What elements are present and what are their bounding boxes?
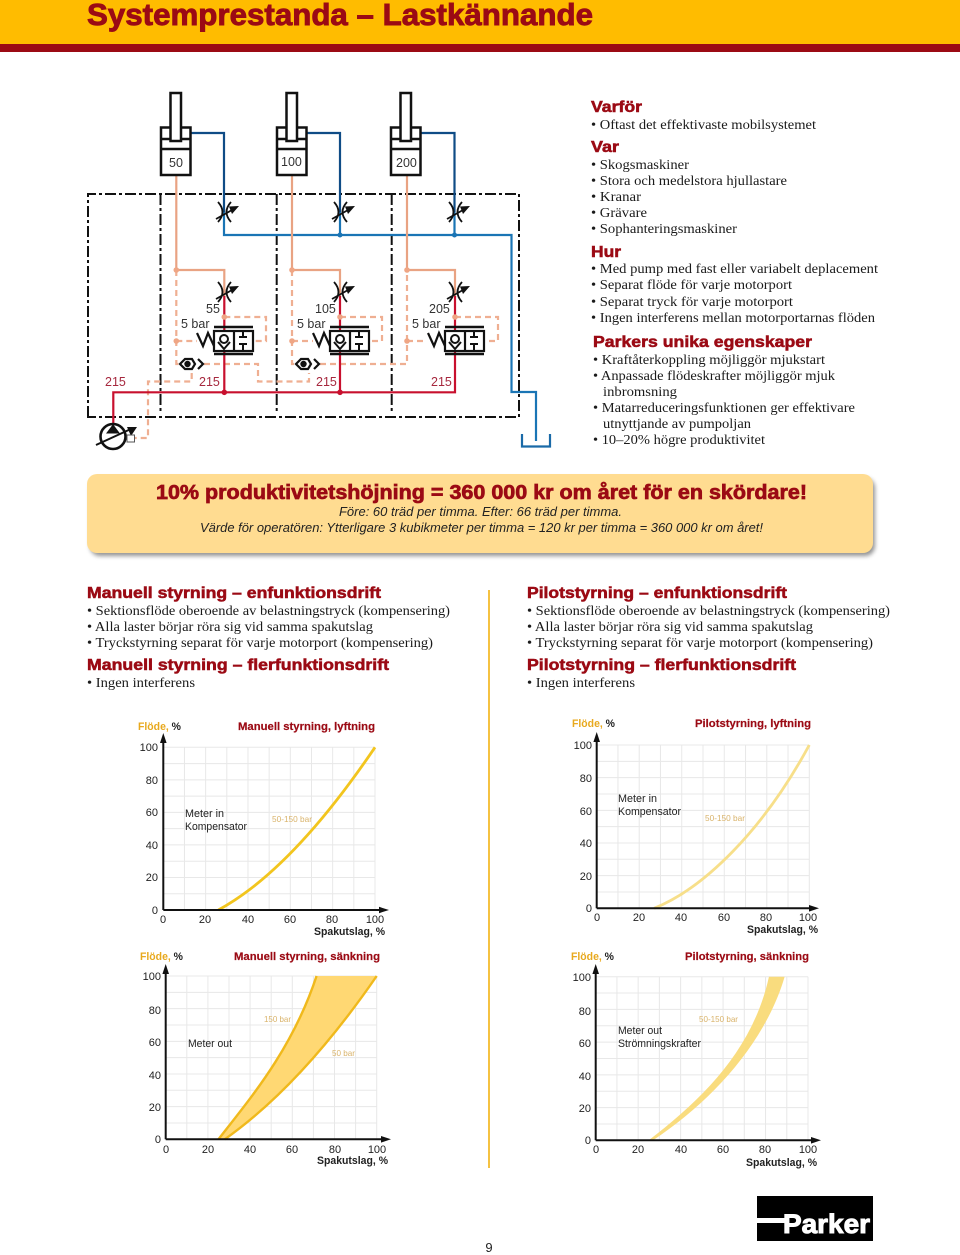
diagram pressure labels: 5 bar [412,317,440,331]
text block: Varför / Var / Hur / Parkers: • Stora och medelstora hjullastare [591,174,787,189]
chart: Manuell styrning, sänkning: 40 [149,1070,161,1082]
diagram pressure labels: 5 bar [297,317,326,331]
callout: productivity: 10% produktivitetshöjning = 360 000 kr om året för en skördare! [156,481,807,504]
chart: Pilotstyrning, sänkning: 0 [585,1135,591,1147]
text block: Varför / Var / Hur / Parkers: • Kranar [591,190,641,205]
text block: Varför / Var / Hur / Parkers: • Anpassade flödeskrafter möjliggör mjuk [593,369,835,384]
diagram pressure labels: 215 [316,375,337,389]
chart: Manuell styrning, lyftning: 20 [146,872,158,884]
chart: Manuell styrning, lyftning: Meter in [185,808,224,820]
header band [0,0,960,52]
diagram pressure labels: 105 [315,302,336,316]
chart: Pilotstyrning, sänkning: 40 [579,1071,591,1083]
diagram pressure labels: 55 [206,302,220,316]
cylinder 1 [161,93,190,175]
diagram pressure labels: 100 [281,155,302,169]
diagram pressure labels [105,155,452,389]
chart: Pilotstyrning, sänkning: 20 [632,1144,644,1156]
chart: Manuell styrning, lyftning: 80 [326,914,338,926]
callout: productivity [87,474,875,556]
text block: Manuell styrning: Manuell styrning – flerfunktionsdrift [87,657,390,674]
chart: Pilotstyrning, sänkning: Pilotstyrning, sänkning [685,951,809,963]
diagram pressure labels: 215 [431,375,452,389]
chart: Pilotstyrning, sänkning: 60 [717,1144,729,1156]
chart: Pilotstyrning, lyftning: 40 [580,838,592,850]
pump [96,424,137,449]
chart: Manuell styrning, lyftning: 20 [199,914,211,926]
callout: productivity: Värde för operatören: Ytterligare 3 kubikmeter per timma = 120 kr per timma = 360 000 kr om året! [200,520,763,535]
diagram pressure labels: 200 [396,156,417,170]
text block: Manuell styrning: Manuell styrning – enfunktionsdrift [87,585,382,602]
chart: Pilotstyrning, sänkning: Spakutslag, % [746,1157,817,1169]
diagram pressure labels: 215 [199,375,220,389]
chart: Manuell styrning, lyftning: Kompensator [185,821,247,833]
chart: Manuell styrning, lyftning: 50-150 bar [272,814,312,824]
callout: productivity: Före: 60 träd per timma. Efter: 66 träd per timma. [339,504,622,519]
blue return lines [190,133,550,446]
chart: Manuell styrning, sänkning: 20 [149,1102,161,1114]
diagram pressure labels: 205 [429,302,450,316]
chart: Manuell styrning, sänkning: 80 [329,1144,341,1156]
compensator valves [197,327,484,354]
chart: Manuell styrning, sänkning: Flöde, % [140,951,183,963]
chart: Pilotstyrning, lyftning: 100 [574,740,592,752]
chart: Manuell styrning, sänkning: 100 [368,1144,386,1156]
chart: Manuell styrning, sänkning: 40 [244,1144,256,1156]
text block: Manuell styrning: • Ingen interferens [87,676,195,691]
chart: Pilotstyrning, lyftning: Meter in [618,793,657,805]
chart: Pilotstyrning, lyftning: Spakutslag, % [747,924,818,936]
text block: Manuell styrning: • Tryckstyrning separat för varje motorport (kompensering) [87,636,433,651]
text block: Varför / Var / Hur / Parkers: Hur [591,244,621,261]
text block: Pilotstyrning: • Sektionsflöde oberoende av belastningstryck (kompensering) [527,604,890,619]
upper restrictors [216,202,470,222]
diagram pressure labels: 5 bar [181,317,210,331]
center divider [488,590,490,1168]
chart: Manuell styrning, lyftning: 0 [160,914,166,926]
chart: Manuell styrning, sänkning: Spakutslag, % [317,1155,388,1167]
text block: Varför / Var / Hur / Parkers: • Separat tryck för varje motorport [591,295,793,310]
chart: Pilotstyrning, sänkning: 40 [675,1144,687,1156]
text block: Varför / Var / Hur / Parkers: • Oftast det effektivaste mobilsystemet [591,118,816,133]
chart: Pilotstyrning, lyftning: 100 [799,912,817,924]
chart: Pilotstyrning, sänkning: 0 [593,1144,599,1156]
hydraulic circuit diagram [88,93,550,449]
text block: Varför / Var / Hur / Parkers: • Separat flöde för varje motorport [591,278,792,293]
dash-dot section boxes [88,194,519,417]
chart: Pilotstyrning, sänkning: 50-150 bar [699,1014,738,1024]
chart: Manuell styrning, lyftning: 100 [366,914,384,926]
chart: Manuell styrning, lyftning: Manuell styrning, lyftning [238,721,375,733]
junction dots [174,267,458,344]
chart: Pilotstyrning, lyftning: 0 [594,912,600,924]
red pressure lines [113,296,455,425]
chart: Pilotstyrning, lyftning: 40 [675,912,687,924]
chart: Manuell styrning, sänkning: Manuell styrning, sänkning [234,951,380,963]
chart: Manuell styrning, lyftning: 40 [242,914,254,926]
chart: Manuell styrning, lyftning: 60 [284,914,296,926]
chart: Manuell styrning, lyftning [138,721,389,938]
text block: Varför / Var / Hur / Parkers: • Grävare [591,206,647,221]
text block: Varför / Var / Hur / Parkers: utnyttjande av pumpoljan [603,417,751,432]
logo: Parker [757,1196,873,1241]
chart: Manuell styrning, sänkning: 100 [143,971,161,983]
chart: Pilotstyrning, lyftning: 80 [580,773,592,785]
chart: Manuell styrning, lyftning: 40 [146,840,158,852]
text block: Varför / Var / Hur / Parkers: • Sophanteringsmaskiner [591,222,737,237]
text block: Pilotstyrning: • Ingen interferens [527,676,635,691]
text block: Manuell styrning: • Sektionsflöde oberoende av belastningstryck (kompensering) [87,604,450,619]
chart: Pilotstyrning, sänkning: 80 [759,1144,771,1156]
chart: Pilotstyrning, lyftning [572,718,819,936]
text block: Pilotstyrning: Pilotstyrning – enfunktionsdrift [527,585,788,602]
diagram pressure labels: 50 [169,156,183,170]
chart: Manuell styrning, lyftning: Flöde, % [138,721,181,733]
chart: Pilotstyrning, lyftning: 80 [760,912,772,924]
chart: Manuell styrning, lyftning: Spakutslag, % [314,926,385,938]
chart: Pilotstyrning, lyftning: 60 [718,912,730,924]
chart: Manuell styrning, lyftning: 60 [146,807,158,819]
chart: Pilotstyrning, lyftning: 0 [586,903,592,915]
cylinder 2 [277,93,306,175]
text block: Pilotstyrning: • Alla laster börjar röra sig vid samma spakutslag [527,620,813,635]
text block: Manuell styrning: • Alla laster börjar röra sig vid samma spakutslag [87,620,373,635]
chart: Manuell styrning, lyftning: 80 [146,775,158,787]
chart: Manuell styrning, sänkning: 0 [155,1134,161,1146]
cylinder 3 [391,93,420,175]
text block: Manuell styrning [87,585,450,691]
logo: Parker: Parker [783,1209,871,1239]
text block: Varför / Var / Hur / Parkers: • Kraftåterkoppling möjliggör mjukstart [593,353,825,368]
text block: Varför / Var / Hur / Parkers [591,99,878,448]
chart: Pilotstyrning, sänkning: 100 [799,1144,817,1156]
text block: Varför / Var / Hur / Parkers: • 10–20% högre produktivitet [593,433,765,448]
text block: Varför / Var / Hur / Parkers: Parkers unika egenskaper [593,334,812,351]
chart: Pilotstyrning, lyftning: Kompensator [618,806,681,818]
chart: Pilotstyrning, lyftning: 60 [580,806,592,818]
diagram pressure labels: 215 [105,375,126,389]
text block: Pilotstyrning [527,585,890,691]
text block: Pilotstyrning: Pilotstyrning – flerfunktionsdrift [527,657,797,674]
chart: Pilotstyrning, sänkning [571,951,821,1169]
chart: Manuell styrning, sänkning: 60 [149,1037,161,1049]
page number: 9 [485,1240,493,1255]
chart: Pilotstyrning, lyftning: 20 [633,912,645,924]
chart: Pilotstyrning, lyftning: 20 [580,871,592,883]
text block: Varför / Var / Hur / Parkers: • Med pump med fast eller variabelt deplacement [591,262,878,277]
shuttle valves [180,359,319,369]
chart: Manuell styrning, sänkning: 80 [149,1005,161,1017]
chart: Pilotstyrning, sänkning: Flöde, % [571,951,614,963]
text block: Varför / Var / Hur / Parkers: • Matarreduceringsfunktionen ger effektivare [593,401,855,416]
text block: Varför / Var / Hur / Parkers: • Ingen interferens mellan motorportarnas flöden [591,311,875,326]
lower restrictors [216,282,470,302]
chart: Manuell styrning, sänkning: Meter out [188,1038,232,1050]
chart: Manuell styrning, sänkning: 0 [163,1144,169,1156]
chart: Pilotstyrning, sänkning: 60 [579,1038,591,1050]
chart: Manuell styrning, lyftning: 100 [140,742,158,754]
text block: Varför / Var / Hur / Parkers: • Skogsmaskiner [591,158,689,173]
chart: Manuell styrning, sänkning: 50 bar [332,1048,355,1058]
chart: Manuell styrning, sänkning: 60 [286,1144,298,1156]
text block: Varför / Var / Hur / Parkers: Varför [591,99,642,116]
text block: Varför / Var / Hur / Parkers: inbromsning [603,385,677,400]
chart: Manuell styrning, lyftning: 0 [152,905,158,917]
chart: Manuell styrning, sänkning [140,951,391,1167]
chart: Pilotstyrning, sänkning: Strömningskrafter [618,1038,701,1050]
text block: Varför / Var / Hur / Parkers: Var [591,139,619,156]
chart: Pilotstyrning, sänkning: 100 [573,972,591,984]
chart: Pilotstyrning, lyftning: Pilotstyrning, lyftning [695,718,811,730]
chart: Pilotstyrning, sänkning: 80 [579,1006,591,1018]
text block: Pilotstyrning: • Tryckstyrning separat för varje motorport (kompensering) [527,636,873,651]
chart: Manuell styrning, sänkning: 150 bar [264,1014,291,1024]
chart: Pilotstyrning, sänkning: 20 [579,1103,591,1115]
orange dashed pilot lines [135,270,309,438]
chart: Manuell styrning, sänkning: 20 [202,1144,214,1156]
chart: Pilotstyrning, sänkning: Meter out [618,1025,662,1037]
chart: Pilotstyrning, lyftning: Flöde, % [572,718,615,730]
chart: Pilotstyrning, lyftning: 50-150 bar [705,813,745,823]
orange supply lines [176,175,455,297]
